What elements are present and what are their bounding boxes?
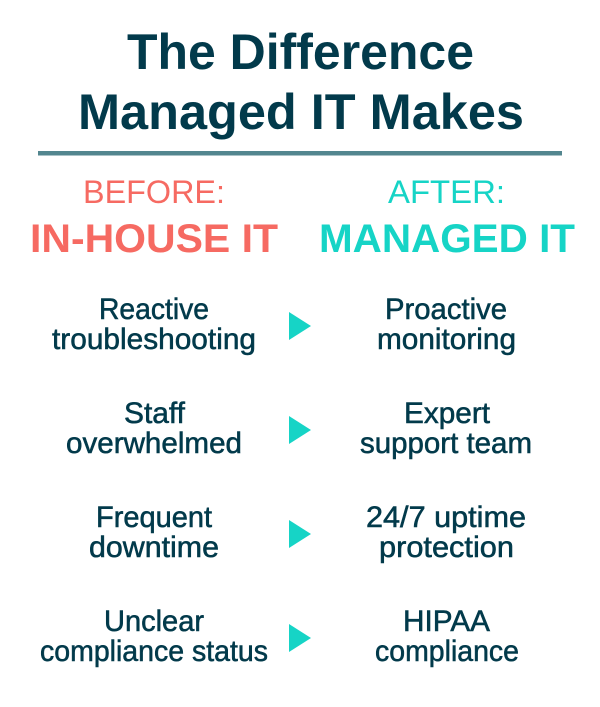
title bbox=[78, 24, 524, 140]
heading: after column: MANAGED IT bbox=[319, 217, 575, 261]
after text: expert support team: support team bbox=[360, 427, 532, 460]
row 4: compliance bbox=[40, 605, 519, 668]
heading: after column: AFTER: bbox=[388, 174, 505, 210]
after text: proactive monitoring: monitoring bbox=[377, 323, 516, 356]
before text: unclear compliance status: Unclear bbox=[104, 605, 204, 638]
after text: expert support team bbox=[360, 397, 532, 460]
before text: unclear compliance status bbox=[40, 605, 268, 668]
after text: uptime protection: 24/7 uptime bbox=[366, 501, 526, 534]
heading: after column bbox=[319, 174, 575, 261]
before text: reactive troubleshooting: Reactive bbox=[99, 293, 209, 326]
after text: HIPAA compliance: HIPAA bbox=[403, 605, 490, 638]
after text: uptime protection bbox=[366, 501, 526, 564]
arrow bbox=[289, 416, 311, 444]
after text: uptime protection: protection bbox=[379, 531, 514, 564]
before text: frequent downtime: Frequent bbox=[96, 501, 212, 534]
heading: before column: IN-HOUSE IT bbox=[30, 217, 278, 261]
arrow bbox=[289, 312, 311, 340]
title: Managed IT Makes bbox=[78, 84, 524, 140]
heading: before column bbox=[30, 174, 278, 261]
after text: proactive monitoring bbox=[377, 293, 516, 356]
after text: HIPAA compliance: compliance bbox=[375, 635, 519, 668]
before text: frequent downtime: downtime bbox=[89, 531, 219, 564]
before text: staff overwhelmed: overwhelmed bbox=[66, 427, 242, 460]
row 2: staff to support team bbox=[66, 397, 532, 460]
before text: staff overwhelmed bbox=[66, 397, 242, 460]
arrow bbox=[289, 520, 311, 548]
after text: expert support team: Expert bbox=[404, 397, 490, 430]
after text: HIPAA compliance bbox=[375, 605, 519, 668]
before text: frequent downtime bbox=[89, 501, 219, 564]
heading: before column: BEFORE: bbox=[83, 174, 225, 210]
row 1: troubleshooting to monitoring bbox=[52, 293, 516, 356]
after text: proactive monitoring: Proactive bbox=[385, 293, 507, 326]
before text: reactive troubleshooting: troubleshooting bbox=[52, 323, 256, 356]
before text: reactive troubleshooting bbox=[52, 293, 256, 356]
before text: staff overwhelmed: Staff bbox=[124, 397, 186, 430]
before text: unclear compliance status: compliance status bbox=[40, 635, 268, 668]
title: The Difference bbox=[127, 24, 474, 80]
arrow bbox=[289, 624, 311, 652]
row 3: downtime to uptime bbox=[89, 501, 526, 564]
